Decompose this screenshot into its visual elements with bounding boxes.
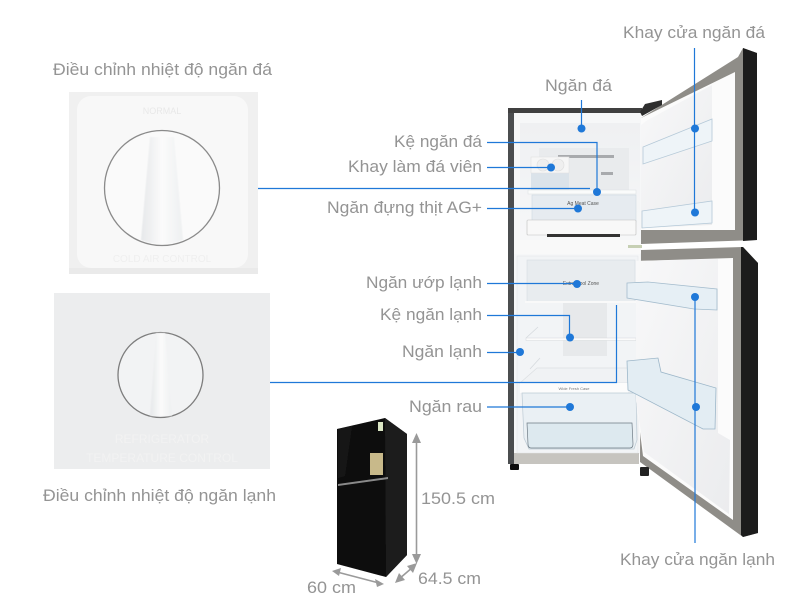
panel: freezer dial photo: COLD AIR CONTROL xyxy=(113,254,212,265)
label: Khay cửa ngăn lạnh: Khay cửa ngăn lạnh xyxy=(620,550,775,569)
label: Ngăn rau: Ngăn rau xyxy=(409,397,482,416)
panel: freezer dial photo: NORMAL xyxy=(143,106,181,116)
callout: fridge dial connector xyxy=(270,305,616,382)
dimension: height: 150.5 cm xyxy=(421,489,495,508)
callout: meat case pointer xyxy=(487,204,582,212)
callout: fridge compartment pointer xyxy=(487,348,524,356)
dimension: depth: 64.5 cm xyxy=(418,569,481,588)
panel: fridge dial photo xyxy=(54,293,270,469)
label: Kệ ngăn lạnh: Kệ ngăn lạnh xyxy=(380,305,482,324)
callout: freezer shelf pointer xyxy=(487,142,601,196)
panel: freezer dial photo xyxy=(69,92,258,274)
freezer compartment xyxy=(520,123,640,237)
upper bin xyxy=(627,282,717,310)
callout: fridge shelf pointer xyxy=(487,316,574,342)
callout: freezer door tray pointer xyxy=(691,48,699,216)
heading: freezer dial: Điều chỉnh nhiệt độ ngăn đá xyxy=(53,60,273,79)
upper door shelf xyxy=(643,119,712,164)
callout: chill zone pointer xyxy=(487,280,581,288)
cabinet body xyxy=(508,108,642,464)
illustration: open refrigerator xyxy=(508,108,642,470)
divider and hinge xyxy=(514,240,641,254)
energy label xyxy=(370,453,383,475)
label: Ngăn lạnh: Ngăn lạnh xyxy=(402,342,482,361)
foot xyxy=(510,464,519,470)
callout: vegetable drawer pointer xyxy=(487,403,574,411)
panel: fridge dial photo: TEMPERATURE CONTROL xyxy=(86,451,238,465)
fridge compartment: Wide Fresh Case xyxy=(559,386,590,391)
label: Ngăn đá: Ngăn đá xyxy=(545,76,613,95)
heading: fridge dial: Điều chỉnh nhiệt độ ngăn lạnh xyxy=(43,486,276,505)
callout: freezer dial connector xyxy=(258,188,590,190)
fridge compartment xyxy=(517,256,638,453)
callout: ice tray pointer xyxy=(487,164,555,172)
illustration: upper door xyxy=(640,48,757,244)
label: Khay cửa ngăn đá: Khay cửa ngăn đá xyxy=(623,23,766,42)
door foot xyxy=(640,467,649,476)
lower bin xyxy=(627,358,716,429)
label: Ngăn ướp lạnh: Ngăn ướp lạnh xyxy=(366,273,482,292)
dimension arrows xyxy=(332,433,421,587)
illustration: small closed refrigerator xyxy=(337,418,407,577)
lower door shelf xyxy=(642,201,712,228)
label: Ngăn đựng thịt AG+: Ngăn đựng thịt AG+ xyxy=(327,198,482,217)
freezer compartment: Ag Meat Case xyxy=(567,201,599,207)
dimension: width: 60 cm xyxy=(307,578,356,597)
fridge compartment: Extra Cool Zone xyxy=(563,281,599,287)
callout: Ngăn đá pointer xyxy=(578,100,586,132)
callout: fridge door tray pointer xyxy=(691,293,700,543)
label: Khay làm đá viên: Khay làm đá viên xyxy=(348,157,482,176)
illustration: lower door xyxy=(627,247,758,537)
panel: fridge dial photo: REFRIGERATOR xyxy=(115,432,209,446)
label: Kệ ngăn đá: Kệ ngăn đá xyxy=(394,132,483,151)
